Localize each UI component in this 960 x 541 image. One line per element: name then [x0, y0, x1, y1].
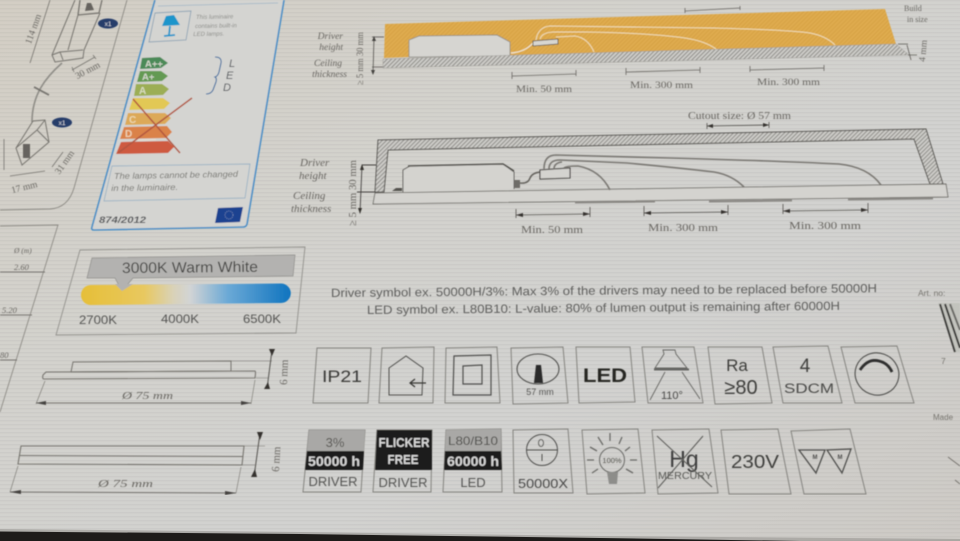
icon: 100% brightness bulb	[582, 429, 645, 494]
cross-section labels: thickness	[291, 203, 331, 215]
energy class scale: A+	[142, 72, 155, 83]
icon: 4 SDCM: 4	[800, 356, 811, 377]
notice box: lamps cannot be changed: The lamps cannot be changed	[114, 169, 238, 181]
text: built-in LED lamps notice: contains built-in	[195, 23, 238, 30]
icon: 230V	[721, 429, 791, 494]
bracket: LED range: D	[223, 82, 231, 94]
bracket: LED range	[206, 57, 235, 94]
icon: IP21: IP21	[322, 367, 362, 386]
panel: size table fragment: 2.60	[14, 262, 30, 272]
top diagram labels: in size	[907, 15, 928, 24]
technical drawing: driver and connector	[0, 0, 127, 210]
icon: driver 3% 50000 h: DRIVER	[308, 474, 358, 489]
icon: driver 3% 50000 h	[303, 430, 365, 492]
badge: x1 driver: x1	[105, 21, 112, 28]
top diagram labels: Ceiling	[314, 59, 342, 69]
text: built-in LED lamps notice: This luminaire	[196, 14, 234, 21]
top diagram labels: height	[319, 43, 343, 53]
icon: MM furniture mounting	[791, 429, 866, 494]
notice box: lamps cannot be changed	[104, 164, 250, 201]
installation diagram: ceiling cross-section	[373, 129, 948, 204]
icon: IP21	[313, 348, 371, 403]
icon: beam angle 110 degrees: 110°	[661, 390, 683, 402]
icon: beam angle 110 degrees	[642, 347, 703, 403]
energy class scale: D	[125, 129, 132, 140]
top diagram labels: Build	[904, 4, 922, 13]
cross-section labels: Driver	[299, 157, 330, 169]
text fragments: right margin: 7	[941, 356, 946, 366]
icon: LED	[576, 347, 635, 403]
icon: indoor use	[379, 347, 434, 403]
cross-section labels: ≥ 5 mm 30 mm	[347, 160, 359, 226]
icon: flicker free driver: DRIVER	[378, 475, 428, 490]
panel: size table fragment	[0, 225, 58, 412]
icon: Ra 80	[708, 347, 772, 404]
panel: size table fragment: 80	[0, 350, 9, 360]
icon: MM furniture mounting: M	[812, 455, 818, 461]
energy class scale	[116, 57, 192, 154]
text fragments: right margin: Art. no:	[918, 288, 945, 298]
panel: energy label	[92, 0, 284, 230]
top diagram labels: Min. 300 mm	[630, 81, 694, 91]
energy class scale: C	[129, 115, 136, 126]
dimension label: 30 mm: 30 mm	[74, 60, 103, 82]
icon: driver 3% 50000 h: 50000 h	[308, 453, 360, 469]
icon: LED: LED	[583, 365, 627, 387]
panel: colour temperature: 6500K	[243, 312, 281, 326]
icon: LED L80/B10 60000 h: 60000 h	[447, 453, 499, 469]
dimension label: 114 mm: 114 mm	[24, 12, 44, 46]
icon: 100% brightness bulb: 100%	[602, 456, 622, 465]
icon: flicker free driver: FREE	[388, 452, 419, 467]
icon: LED L80/B10 60000 h: L80/B10	[448, 434, 498, 448]
icon: 230V: 230V	[731, 451, 780, 472]
explanatory text: driver and LED symbols: LED symbol ex. L80B10: L-value: 80% of lumen output is remaining after 60000H	[367, 299, 840, 317]
icon: cutout 57 mm	[511, 347, 568, 404]
cross-section labels: Cutout size: Ø 57 mm	[688, 111, 791, 122]
cross-section labels: height	[299, 170, 327, 182]
text: built-in LED lamps notice: LED lamps.	[193, 32, 224, 38]
icon: LED L80/B10 60000 h	[443, 429, 502, 492]
explanatory text: driver and LED symbols: Driver symbol ex. 50000H/3%: Max 3% of the drivers may need to be replaced before 50000H	[331, 281, 877, 300]
top diagram labels: ≥ 5 mm 30 mm	[356, 31, 366, 85]
notice box: lamps cannot be changed: in the luminaire.	[111, 182, 178, 193]
heading: 3000K warm white: 3000K Warm White	[122, 259, 258, 277]
colour temperature gradient bar	[81, 284, 291, 305]
icon: no mercury: Hg	[669, 446, 699, 472]
icon: flicker free driver	[373, 430, 432, 492]
icon: Ra 80: Ra	[726, 356, 748, 375]
icon: flicker free driver: FLICKER	[378, 435, 430, 450]
top diagram labels: Min. 300 mm	[757, 78, 821, 88]
dimension drawing: stepped trim: Ø 75 mm	[121, 390, 173, 402]
icon: class II double square	[445, 347, 500, 403]
top diagram labels: Driver	[317, 32, 343, 42]
panel: colour temperature	[56, 247, 305, 335]
icon: 50000 switching cycles: 50000X	[518, 476, 568, 491]
scale labels: 2700K	[79, 313, 117, 327]
bracket: LED range: E	[226, 70, 234, 82]
regulation number: 874/2012	[99, 215, 147, 226]
cross-section labels: Min. 300 mm	[648, 222, 719, 234]
cross-section labels	[291, 111, 868, 236]
icon: dimmable	[841, 346, 914, 403]
top diagram labels: Min. 50 mm	[516, 85, 573, 95]
icon: cutout 57 mm: 57 mm	[526, 387, 554, 397]
energy class scale: A++	[145, 59, 163, 70]
icon: no mercury	[652, 429, 718, 494]
top diagram labels: 4 mm	[918, 39, 930, 62]
icon: lamp	[149, 11, 191, 42]
icon: LED L80/B10 60000 h: LED	[460, 475, 486, 490]
icon: driver 3% 50000 h: 3%	[326, 435, 345, 450]
explanatory text: driver and LED symbols	[331, 281, 877, 317]
top diagram labels	[312, 4, 930, 95]
cross-section labels: Ceiling	[293, 190, 326, 202]
packaging bottom edge shadow	[0, 529, 960, 541]
dimension drawing: stepped trim	[36, 349, 291, 405]
dimension label: 17 mm: 17 mm	[10, 180, 39, 196]
badge: x1 driver	[98, 18, 118, 28]
top diagram labels: thickness	[312, 70, 347, 80]
energy class scale: A	[139, 86, 146, 97]
dimension drawing: flat trim: 6 mm	[270, 446, 283, 472]
text fragments: right margin: Made	[933, 413, 954, 422]
installation diagram: recessed in ceiling, highlighted	[383, 9, 909, 68]
icon: 50000 switching cycles	[513, 429, 573, 493]
icon: EU flag	[215, 207, 243, 223]
text fragments: right margin	[918, 288, 960, 484]
dimension label: 31 mm: 31 mm	[54, 149, 77, 177]
cross-section labels: Min. 50 mm	[521, 224, 583, 236]
panel: colour temperature: 4000K	[161, 312, 199, 326]
dimension drawing: flat trim: Ø 75 mm	[97, 478, 153, 490]
dimension drawing: flat trim	[10, 432, 283, 495]
icon: Ra 80: ≥80	[724, 377, 758, 399]
badge: x1 connector	[52, 118, 72, 128]
bracket: LED range: L	[229, 58, 235, 70]
icon: 4 SDCM	[773, 346, 842, 403]
cross-section labels: Min. 300 mm	[789, 220, 862, 232]
badge: x1 connector: x1	[59, 120, 66, 127]
dimension drawing: stepped trim: 6 mm	[278, 359, 291, 385]
icon: no mercury: MERCURY	[658, 471, 712, 482]
panel: size table fragment: Ø (m)	[13, 246, 32, 255]
icon: 4 SDCM: SDCM	[784, 381, 834, 396]
panel: size table fragment: 5.20	[2, 305, 18, 315]
icon: MM furniture mounting: M	[838, 455, 842, 461]
